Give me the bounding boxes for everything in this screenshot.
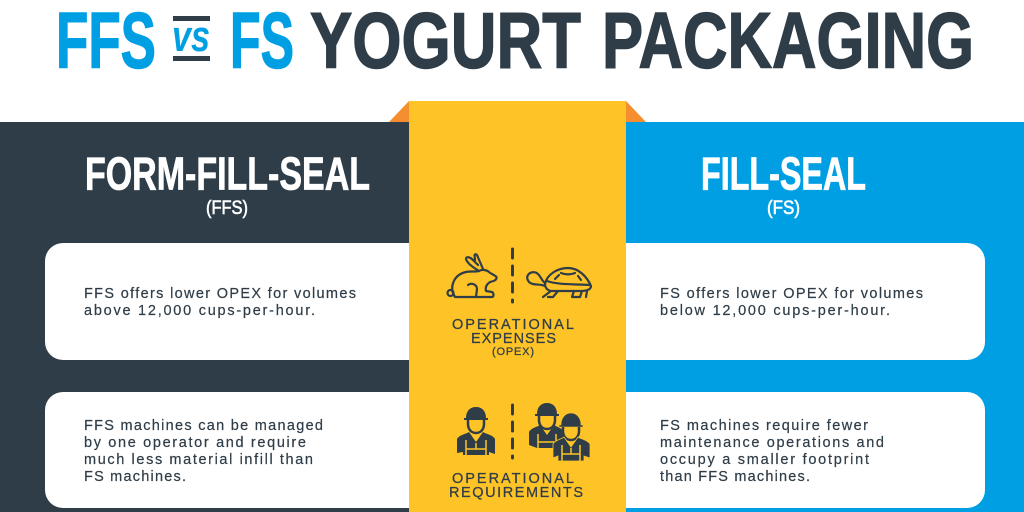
- card: FS opex: [590, 243, 985, 360]
- label: operational expenses: OPERATIONAL: [452, 317, 574, 333]
- card: FS requirements: occupy a smaller footprint: [660, 452, 869, 468]
- label: operational expenses: [452, 317, 574, 358]
- title: vs: [172, 12, 210, 61]
- icon: rabbit: [448, 254, 497, 297]
- divider: requirements: [511, 405, 514, 458]
- label: operational expenses: (OPEX): [492, 346, 534, 358]
- heading: fill-seal: [701, 148, 866, 219]
- heading: form-fill-seal: FORM-FILL-SEAL: [85, 148, 370, 200]
- card: FFS opex: above 12,000 cups-per-hour.: [84, 303, 315, 319]
- heading: form-fill-seal: [85, 148, 370, 219]
- heading: form-fill-seal: (FFS): [206, 198, 248, 219]
- ribbon fold left: [389, 101, 409, 122]
- icon: one worker: [457, 407, 495, 455]
- card: FFS requirements: FFS machines can be managed: [84, 418, 323, 434]
- card: FS opex: below 12,000 cups-per-hour.: [660, 303, 890, 319]
- center yellow column: [409, 101, 626, 512]
- label: operational expenses: EXPENSES: [471, 331, 556, 347]
- title: [56, 0, 974, 84]
- ribbon fold right: [626, 101, 646, 122]
- card: FFS requirements: by one operator and require: [84, 435, 306, 451]
- card: FS opex: FS offers lower OPEX for volumes: [660, 286, 923, 302]
- card: FS requirements: maintenance operations and: [660, 435, 884, 451]
- card: FFS requirements: much less material infill than: [84, 452, 313, 468]
- icon: two workers: [529, 403, 590, 461]
- label: operational requirements: [449, 471, 583, 501]
- panel: form-fill-seal: [0, 122, 410, 512]
- label: operational requirements: REQUIREMENTS: [449, 485, 583, 501]
- card: FFS requirements: [45, 392, 445, 508]
- heading: fill-seal: (FS): [767, 198, 800, 219]
- card: FS requirements: FS machines require fewer: [660, 418, 868, 434]
- card: FFS opex: FFS offers lower OPEX for volumes: [84, 286, 356, 302]
- card: FS requirements: [590, 392, 985, 508]
- panel: fill-seal: [626, 122, 1024, 512]
- divider: opex: [511, 249, 514, 302]
- label: operational requirements: OPERATIONAL: [452, 471, 574, 487]
- card: FS requirements: than FFS machines.: [660, 469, 810, 485]
- icon: turtle: [527, 268, 591, 297]
- heading: fill-seal: FILL-SEAL: [701, 148, 866, 200]
- card: FFS requirements: FS machines.: [84, 469, 186, 485]
- card: FFS opex: [45, 243, 445, 360]
